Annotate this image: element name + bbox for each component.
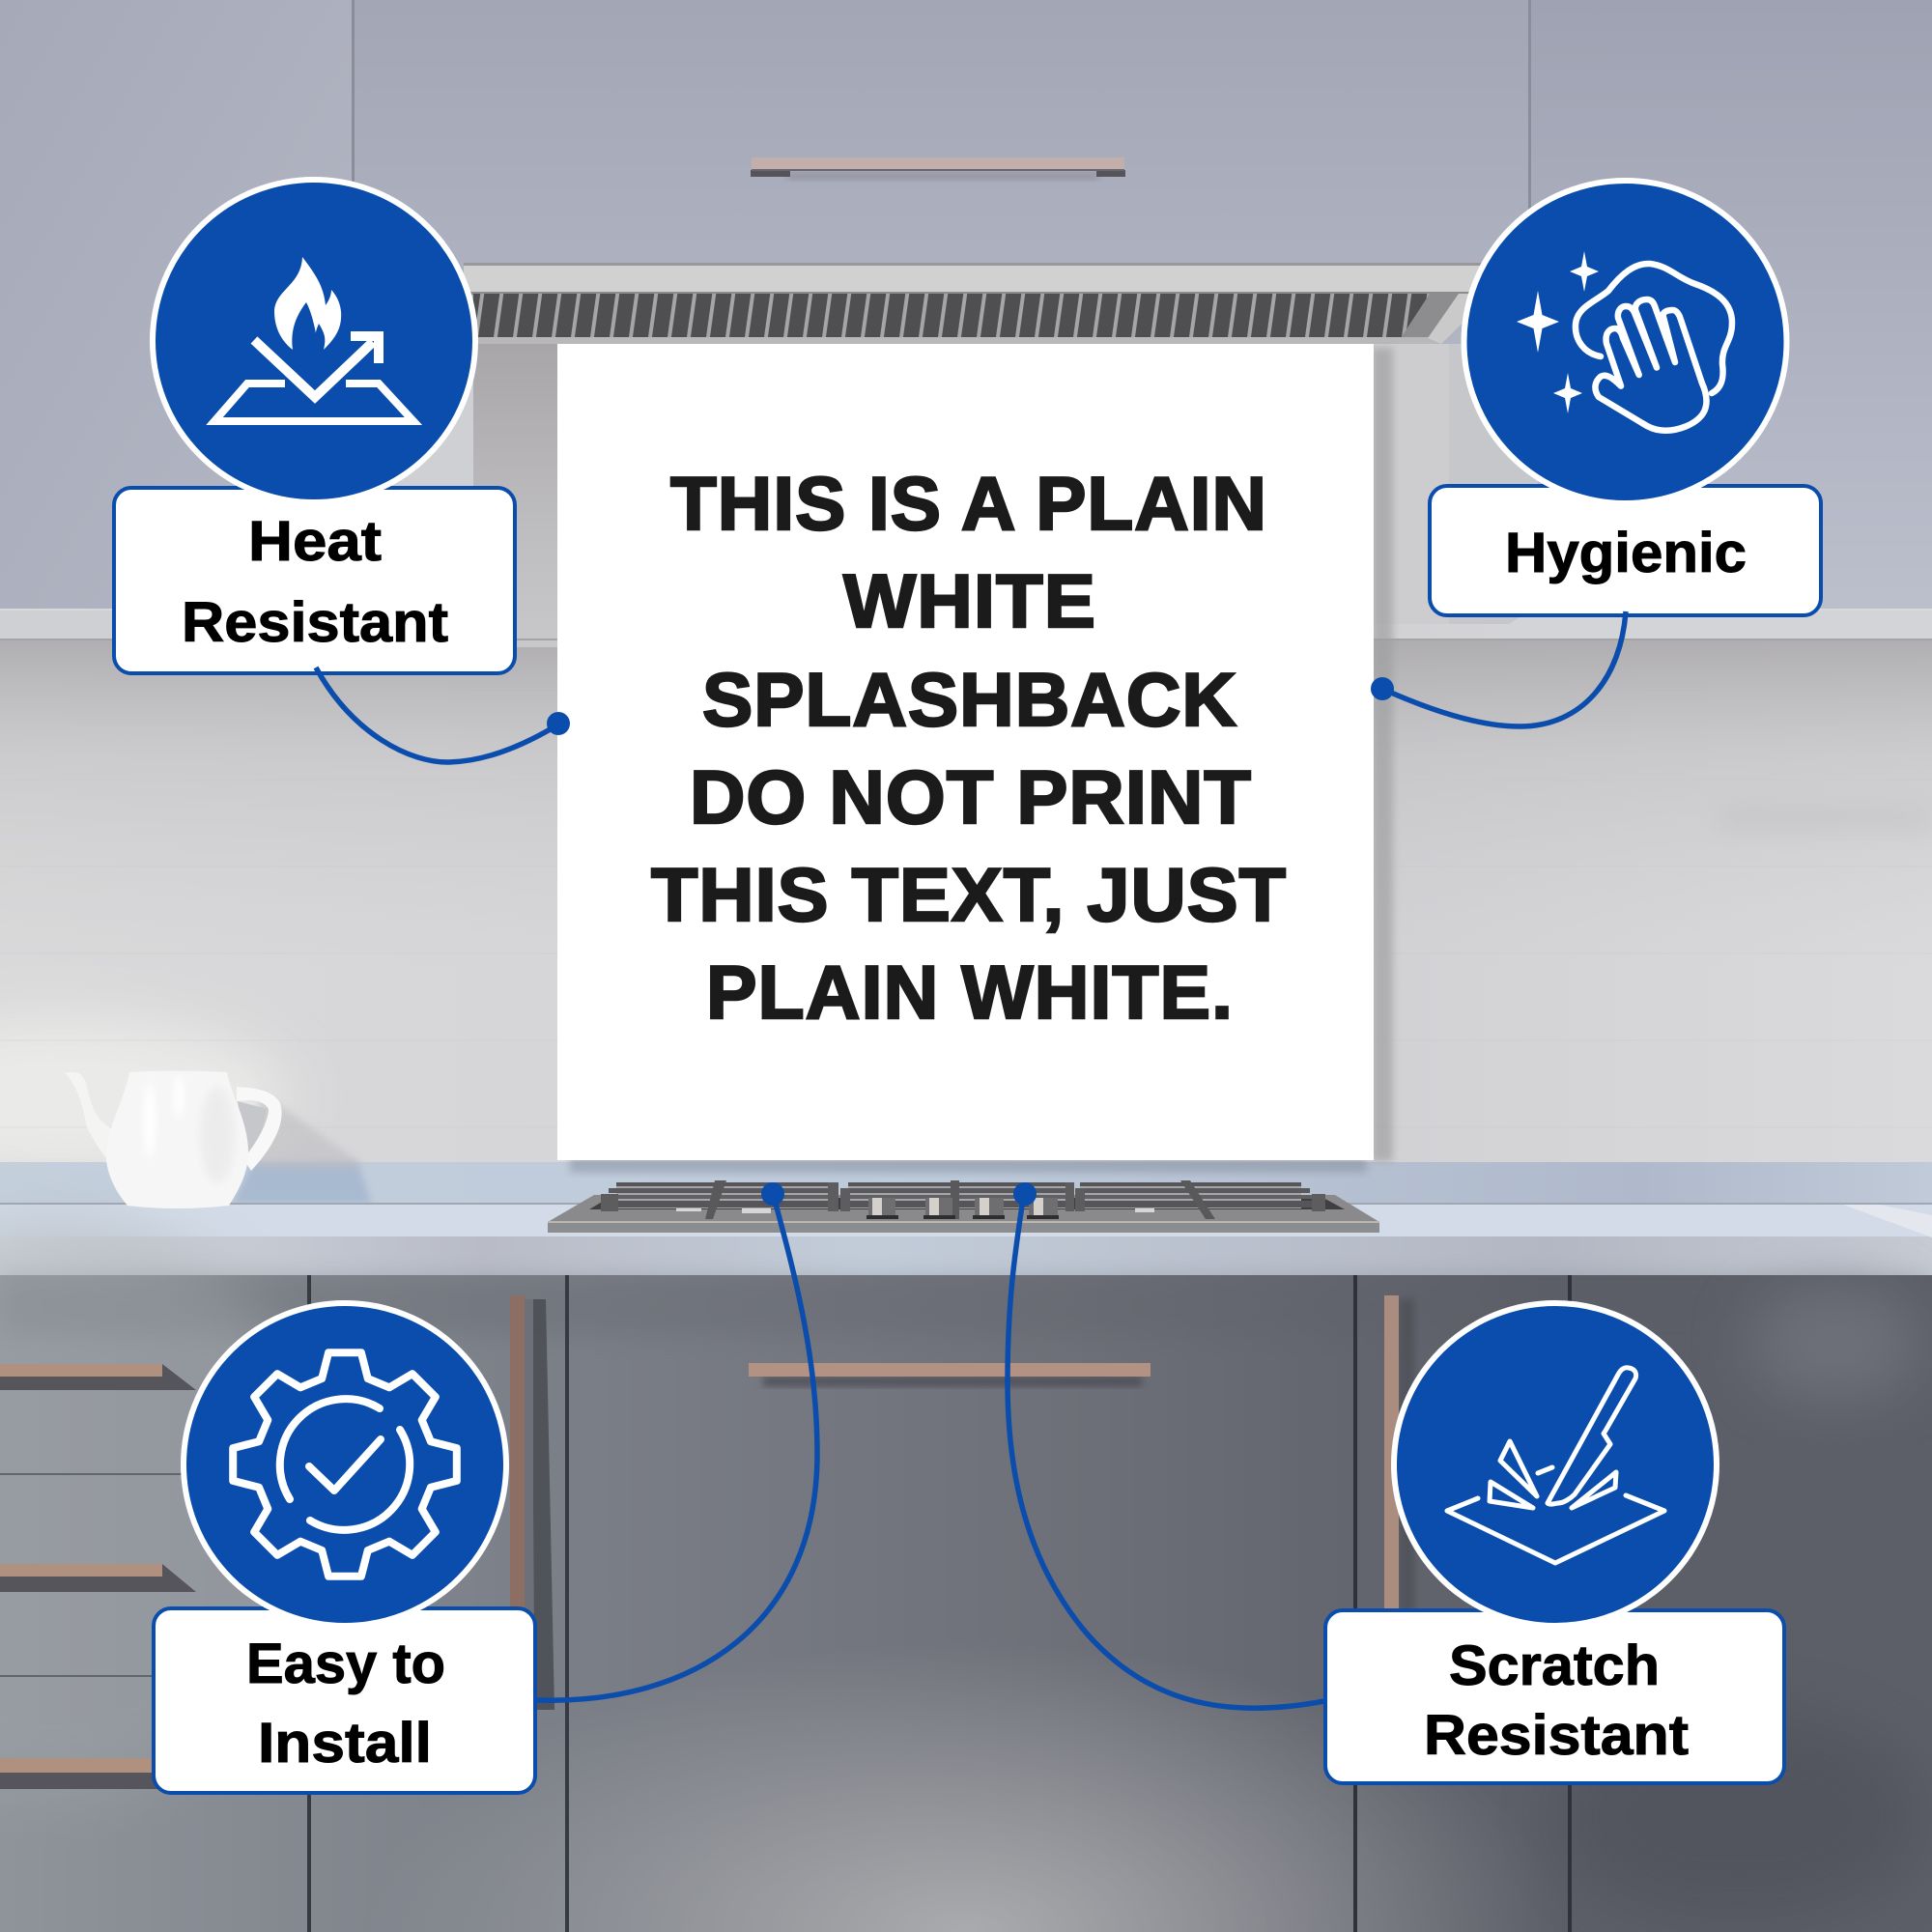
connector: easy to install xyxy=(537,1182,817,1700)
label box xyxy=(1430,486,1821,615)
label text xyxy=(1424,1634,1689,1767)
connector: hygienic xyxy=(1371,611,1626,726)
base cabinet handles xyxy=(0,1295,1414,1789)
icon badge xyxy=(1394,1303,1717,1626)
splashback text: PLAIN WHITE. xyxy=(706,950,1234,1035)
label box xyxy=(154,1608,535,1793)
label text: Scratch xyxy=(1449,1634,1660,1697)
label box xyxy=(1325,1610,1784,1783)
icon badge xyxy=(184,1303,506,1626)
splashback text: SPLASHBACK xyxy=(702,657,1237,742)
splashback text: DO NOT PRINT xyxy=(690,754,1252,839)
panel: plain white splashback xyxy=(557,344,1393,1161)
callout: easy to install xyxy=(154,1303,535,1793)
icon: gear with check xyxy=(233,1352,457,1577)
icon badge xyxy=(153,180,475,502)
label text xyxy=(246,1633,445,1775)
cabinet handle top xyxy=(751,157,1125,180)
connector: scratch resistant xyxy=(1008,1182,1324,1708)
splashback text: THIS IS A PLAIN xyxy=(670,461,1267,546)
callout: scratch resistant xyxy=(1325,1303,1784,1783)
splashback text: WHITE xyxy=(843,558,1096,643)
label text: Resistant xyxy=(182,591,448,654)
label box xyxy=(114,488,515,673)
underside of upper cabinets xyxy=(0,611,1932,640)
burner grate left xyxy=(601,1180,838,1219)
label text: Heat xyxy=(248,510,382,573)
upper cabinets xyxy=(0,0,1932,618)
control knobs xyxy=(867,1198,1059,1219)
icon badge xyxy=(1464,181,1787,503)
label text: Resistant xyxy=(1424,1704,1689,1767)
connector: heat resistant xyxy=(316,668,570,762)
burner grate right xyxy=(1075,1180,1325,1219)
splashback text xyxy=(651,461,1287,1035)
callout: hygienic xyxy=(1430,181,1821,615)
white teapot xyxy=(65,1070,359,1208)
base cabinets xyxy=(0,1217,1932,1932)
icon: hand wiping with sparkles xyxy=(1517,251,1732,431)
extractor hood xyxy=(464,263,1492,344)
icon: knife scratching surface xyxy=(1447,1368,1664,1563)
gas hob xyxy=(548,1180,1379,1233)
burner grate centre xyxy=(840,1180,1074,1219)
icon: flame on surface xyxy=(214,257,413,421)
wall tiles xyxy=(0,338,1932,1174)
label text xyxy=(182,510,448,654)
label text: Install xyxy=(258,1712,432,1775)
callout: heat resistant xyxy=(114,180,515,673)
kitchen counter xyxy=(0,1162,1932,1275)
label text: Hygienic xyxy=(1505,522,1747,584)
label text: Easy to xyxy=(246,1633,445,1695)
splashback shadow xyxy=(570,1155,1367,1173)
splashback text: THIS TEXT, JUST xyxy=(651,852,1287,937)
